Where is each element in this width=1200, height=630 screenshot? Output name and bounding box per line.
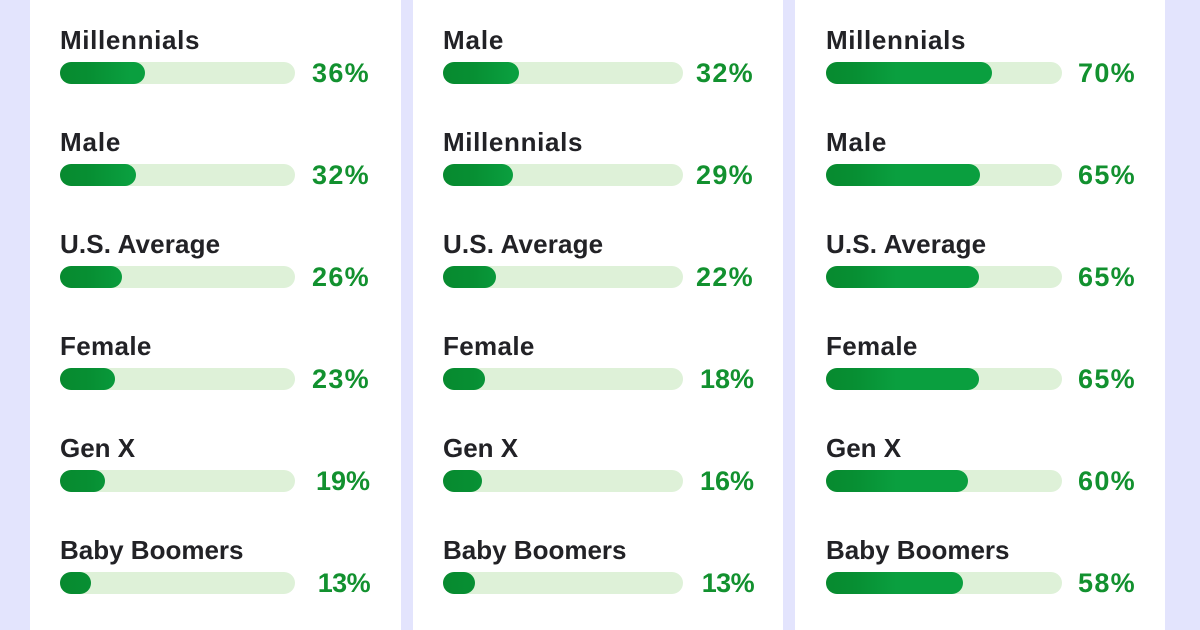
- row: Millennials 29%: 29%: [696, 160, 754, 190]
- row: Gen X 16%: Gen X: [443, 433, 518, 463]
- row: Gen X 16%: [443, 433, 754, 496]
- row: Baby Boomers 58%: 58%: [1078, 568, 1136, 598]
- row: Millennials 29%: [443, 127, 754, 190]
- row: Male 65%: [826, 127, 1136, 190]
- row: Male 32%: [443, 25, 754, 88]
- row: Millennials 29%: Millennials: [443, 127, 583, 157]
- row: Baby Boomers 13%: Baby Boomers: [443, 535, 626, 565]
- row: Millennials 70%: Millennials: [826, 25, 966, 55]
- row: Female 65%: 65%: [1078, 364, 1136, 394]
- row: Millennials 36%: [60, 25, 370, 88]
- row: Female 65%: [826, 331, 1136, 394]
- row: Millennials 70%: 70%: [1078, 58, 1136, 88]
- row: Gen X 60%: Gen X: [826, 433, 901, 463]
- row: Female 18%: [443, 331, 754, 394]
- row: U.S. Average 26%: [60, 229, 370, 292]
- row: Millennials 70%: [826, 25, 1136, 88]
- row: Female 65%: Female: [826, 331, 918, 361]
- row: Baby Boomers 13%: [60, 535, 370, 598]
- row: Male 32%: 32%: [696, 58, 754, 88]
- row: Female 23%: [60, 331, 370, 394]
- row: Baby Boomers 13%: 13%: [702, 568, 754, 598]
- row: U.S. Average 26%: 26%: [312, 262, 370, 292]
- row: Male 32%: 32%: [312, 160, 370, 190]
- row: U.S. Average 22%: 22%: [696, 262, 754, 292]
- row: Baby Boomers 58%: [826, 535, 1136, 598]
- panel: left column: [30, 0, 401, 630]
- row: Gen X 19%: 19%: [316, 466, 370, 496]
- row: Baby Boomers 13%: Baby Boomers: [60, 535, 244, 565]
- row: U.S. Average 22%: [443, 229, 754, 292]
- row: Female 18%: Female: [443, 331, 535, 361]
- row: Female 18%: 18%: [700, 364, 754, 394]
- row: Baby Boomers 58%: Baby Boomers: [826, 535, 1010, 565]
- row: Male 65%: Male: [826, 127, 887, 157]
- row: Male 32%: Male: [443, 25, 504, 55]
- row: Gen X 19%: [60, 433, 370, 496]
- row: Gen X 19%: Gen X: [60, 433, 135, 463]
- row: Millennials 36%: 36%: [312, 58, 370, 88]
- row: Gen X 60%: 60%: [1078, 466, 1136, 496]
- row: U.S. Average 26%: U.S. Average: [60, 229, 220, 259]
- row: Male 32%: Male: [60, 127, 121, 157]
- row: Male 32%: [60, 127, 370, 190]
- row: Gen X 16%: 16%: [700, 466, 754, 496]
- row: Millennials 36%: Millennials: [60, 25, 200, 55]
- row: U.S. Average 65%: U.S. Average: [826, 229, 986, 259]
- row: Baby Boomers 13%: [443, 535, 754, 598]
- row: Gen X 60%: [826, 433, 1136, 496]
- panel: middle column: [413, 0, 783, 630]
- row: Baby Boomers 13%: 13%: [318, 568, 370, 598]
- row: Male 65%: 65%: [1078, 160, 1136, 190]
- row: U.S. Average 65%: [826, 229, 1136, 292]
- row: Female 23%: Female: [60, 331, 152, 361]
- row: U.S. Average 22%: U.S. Average: [443, 229, 603, 259]
- row: U.S. Average 65%: 65%: [1078, 262, 1136, 292]
- panel: right column: [795, 0, 1165, 630]
- row: Female 23%: 23%: [312, 364, 370, 394]
